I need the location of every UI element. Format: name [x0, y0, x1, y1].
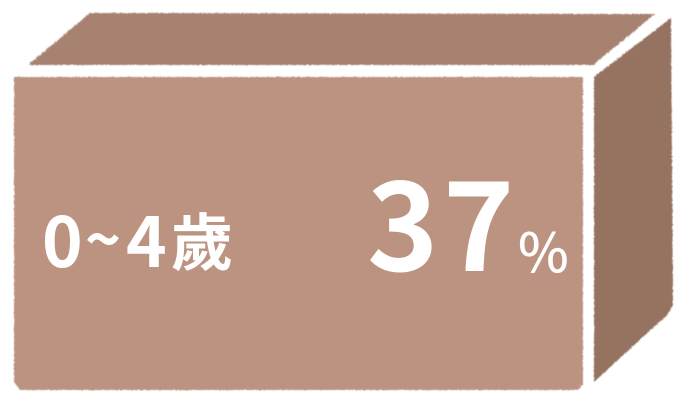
- percent sign: %: [518, 209, 569, 288]
- age label: 4: [126, 187, 167, 287]
- percentage value: 3: [367, 131, 438, 306]
- age label: ~: [85, 190, 121, 280]
- cube right face: [594, 18, 673, 382]
- age label: [42, 187, 233, 287]
- percentage value: [367, 131, 569, 306]
- percentage value: 7: [443, 131, 514, 306]
- cube front face: [14, 77, 583, 390]
- age label: 歲: [171, 193, 233, 283]
- age label: 0: [42, 187, 83, 287]
- cube top face: [28, 13, 655, 65]
